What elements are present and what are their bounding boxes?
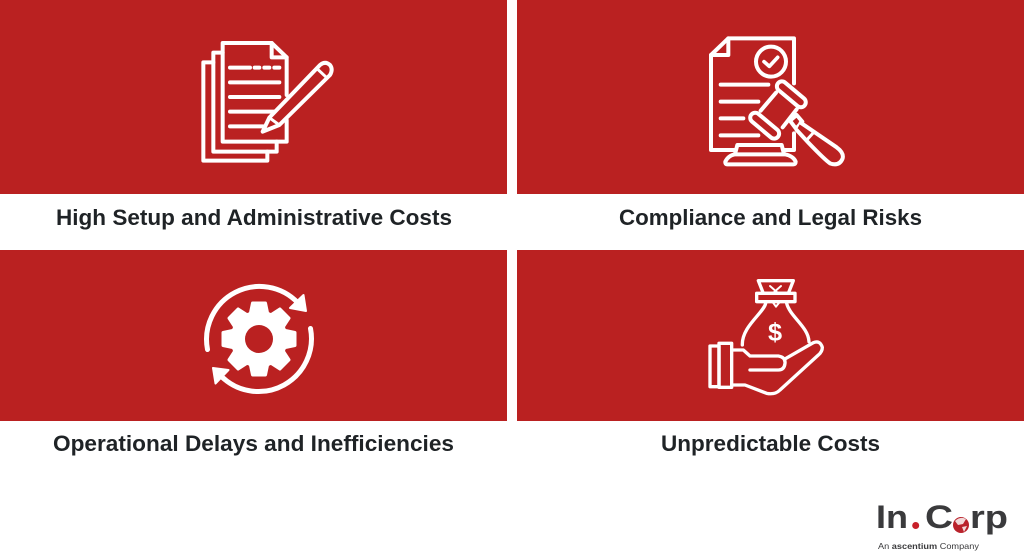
icon: documents and pencil bbox=[203, 43, 332, 161]
logo: InCorp: rp bbox=[970, 499, 1008, 535]
heading: high setup: High Setup and Administrative Costs bbox=[56, 205, 452, 230]
logo: InCorp: In bbox=[876, 499, 908, 535]
dollar sign: $ bbox=[768, 319, 782, 347]
panel: unpredictable costs bbox=[517, 250, 1024, 421]
heading: unpredictable costs: Unpredictable Costs bbox=[661, 431, 880, 456]
heading: compliance: Compliance and Legal Risks bbox=[619, 205, 922, 230]
tagline: An ascentium Company bbox=[878, 541, 980, 551]
panel: operational delays and inefficiencies bbox=[0, 250, 507, 421]
panel: high setup and administrative costs bbox=[0, 0, 507, 194]
icon: globe bbox=[953, 517, 969, 533]
heading: operational delays: Operational Delays and Inefficiencies bbox=[53, 431, 454, 456]
logo: InCorp: C bbox=[925, 499, 953, 535]
panel: compliance and legal risks bbox=[517, 0, 1024, 194]
icon: gear with cycle arrows bbox=[207, 286, 311, 392]
icon: legal document and gavel bbox=[711, 38, 843, 164]
logo: InCorp bbox=[876, 499, 1008, 551]
icon: hand holding money bag bbox=[710, 281, 822, 394]
